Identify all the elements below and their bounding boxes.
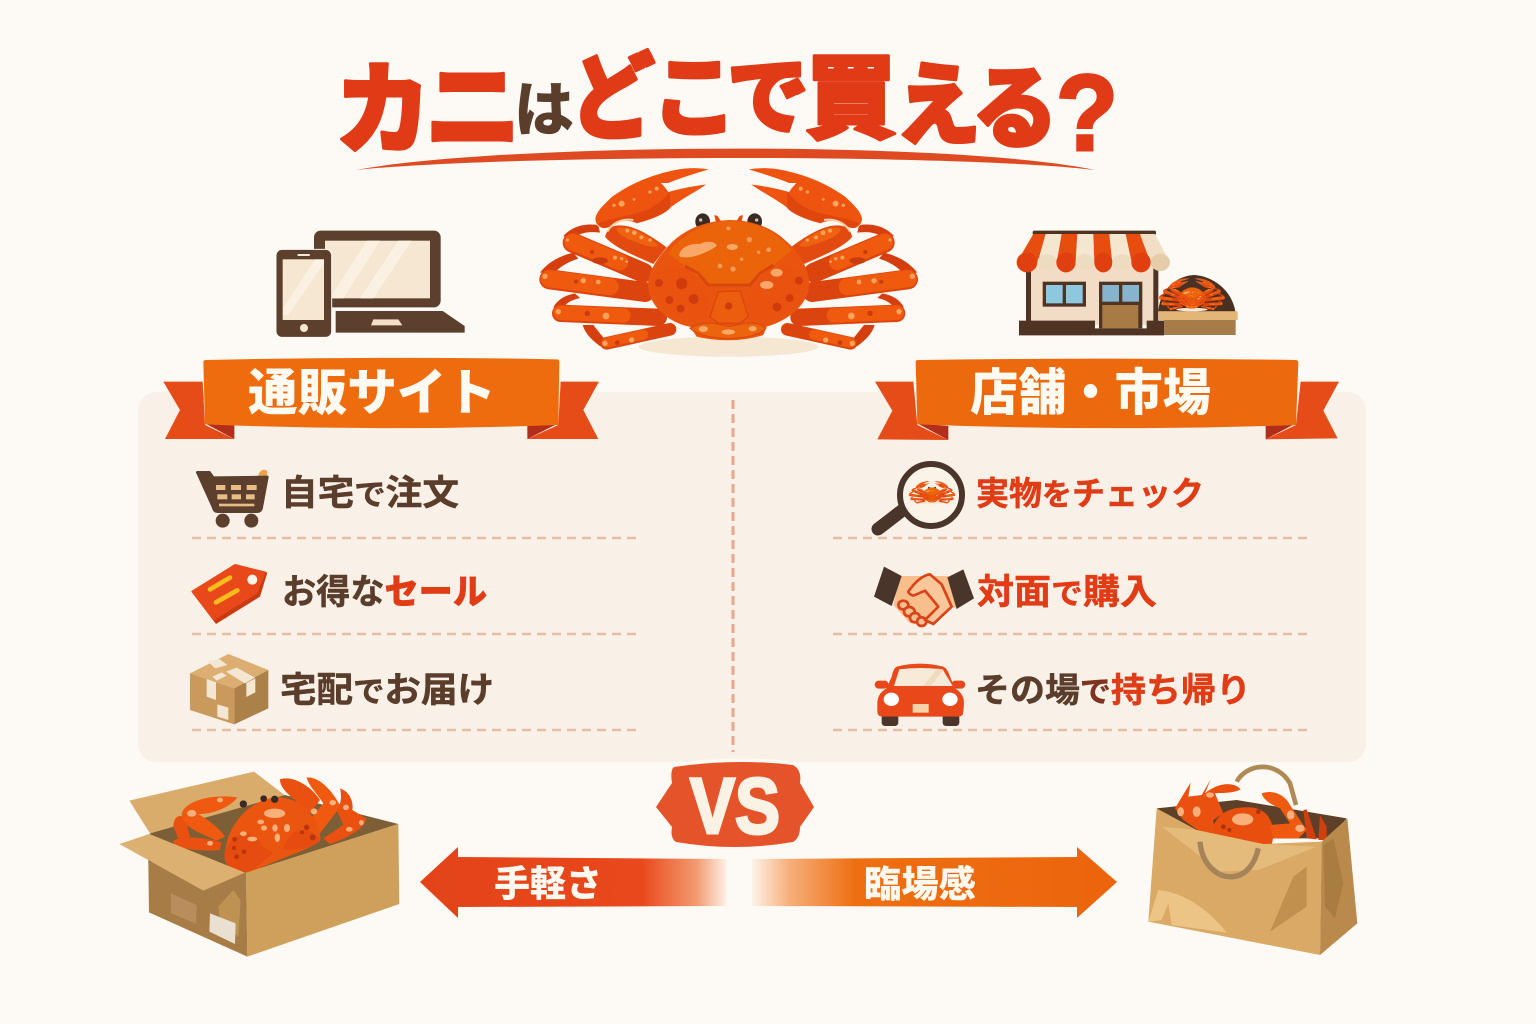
- title: [335, 46, 1118, 173]
- text: 実物をチェック: 実物をチェック: [976, 475, 1204, 512]
- arrow: 臨場感: [752, 847, 1117, 918]
- title: 買: [805, 49, 897, 151]
- icon: laptop and smartphone: [276, 231, 465, 337]
- title: は: [514, 77, 574, 144]
- icon: cardboard package: [190, 654, 268, 724]
- icon: sale tag: [191, 564, 267, 624]
- center divider: [732, 400, 734, 752]
- text: お得なセール: お得なセール: [282, 573, 487, 612]
- icon: shopping cart: [197, 470, 267, 528]
- VS badge: [656, 761, 814, 850]
- text: 対面で購入: 対面で購入: [977, 573, 1157, 612]
- title underline: [356, 149, 1095, 170]
- title: ?: [1056, 52, 1118, 173]
- crab illustration: [540, 168, 917, 357]
- paper shopping bag with crab: [1148, 767, 1357, 955]
- icon: handshake: [874, 567, 974, 626]
- icon: storefront with crab stand: [1017, 231, 1238, 335]
- ribbon: 店舗・市場: 店舗・市場: [970, 365, 1211, 421]
- icon: car: [875, 664, 965, 726]
- title: ニ: [425, 53, 521, 165]
- text: 自宅で注文: 自宅で注文: [281, 474, 459, 513]
- cardboard box with crab: [119, 772, 399, 957]
- item dividers: [192, 538, 1308, 730]
- icon: magnifier with crab: [878, 464, 962, 529]
- arrow: 臨場感: 臨場感: [864, 864, 976, 905]
- comparison panel: [138, 392, 1366, 762]
- arrow: 手軽さ: [420, 847, 727, 918]
- title: る: [972, 60, 1058, 160]
- title: カ: [335, 55, 431, 167]
- title: え: [895, 57, 981, 157]
- arrow: 手軽さ: 手軽さ: [494, 863, 602, 904]
- title: こ: [652, 49, 737, 149]
- VS badge: VS: [690, 761, 780, 850]
- ribbon: 通販サイト: 通販サイト: [248, 365, 496, 421]
- ribbon: 通販サイト: [163, 358, 599, 439]
- text: その場で持ち帰り: その場で持ち帰り: [975, 672, 1251, 710]
- title: ど: [570, 46, 655, 152]
- title: で: [727, 51, 809, 145]
- ribbon: 店舗・市場: [875, 359, 1339, 440]
- text: 宅配でお届け: 宅配でお届け: [280, 671, 494, 710]
